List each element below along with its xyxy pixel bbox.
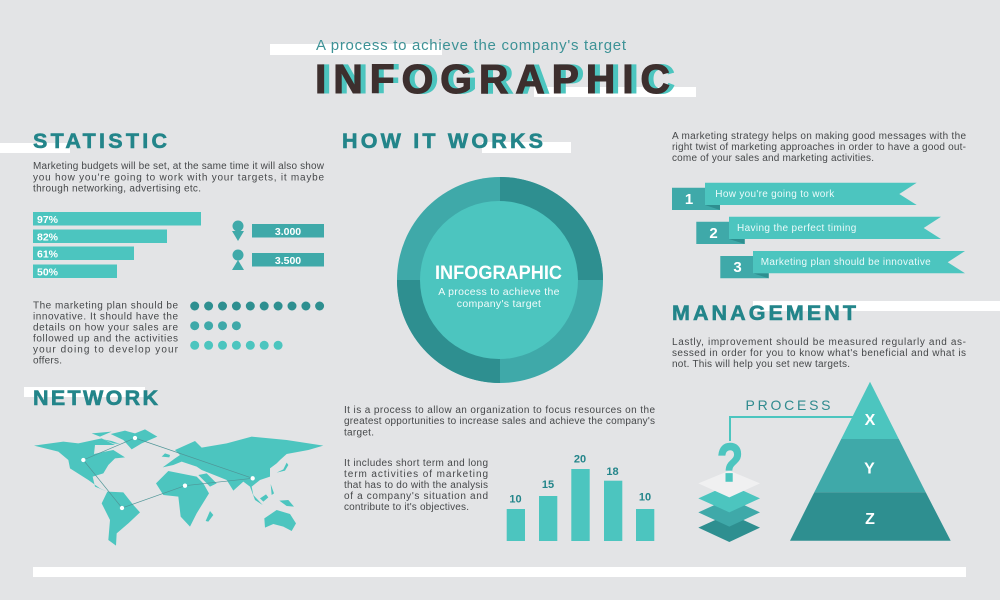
ribbon 3: Marketing plan should be innovative bbox=[761, 257, 931, 268]
ribbon 1 bbox=[672, 183, 917, 210]
text block: marketing plan: The marketing plan should be bbox=[33, 300, 178, 312]
text block: marketing budgets: through networking, advertising etc. bbox=[33, 184, 201, 194]
icon: female figure with 3.500 bbox=[232, 250, 324, 270]
bar chart: values: 10 bbox=[639, 492, 651, 504]
title: INFOGRAPHIC bbox=[320, 56, 675, 102]
text block: management: not. This will help you set new targets. bbox=[672, 359, 850, 370]
ribbon 3: 3 bbox=[733, 259, 742, 276]
title: INFOGRAPHIC bbox=[315, 56, 670, 102]
bar chart: values: 20 bbox=[574, 454, 586, 466]
heading: how it works: HOW IT WORKS bbox=[342, 129, 543, 153]
bar chart: values: 15 bbox=[542, 479, 554, 491]
text block: short and long term bbox=[344, 458, 488, 513]
text block: marketing strategy bbox=[672, 131, 966, 164]
text block: marketing budgets bbox=[33, 161, 325, 194]
dot chart bbox=[190, 302, 324, 350]
icon: male figure with 3.000: 3.000 bbox=[275, 226, 301, 238]
circle diagram bbox=[397, 177, 603, 383]
panel: network bbox=[33, 386, 323, 546]
ribbon 3 bbox=[720, 251, 965, 278]
ribbon 1: 1 bbox=[685, 191, 693, 208]
text block: management: sessed in order for you to know what's beneficial and what is bbox=[672, 348, 966, 359]
pyramid: X bbox=[865, 412, 876, 429]
bar chart: percentages: 97% bbox=[37, 214, 59, 226]
icon: female figure with 3.500: 3.500 bbox=[275, 255, 301, 267]
connector line bbox=[730, 417, 855, 441]
bar chart: percentages bbox=[33, 212, 201, 278]
text block: short and long term: that has to do with the analysis bbox=[344, 480, 488, 491]
world map bbox=[34, 429, 323, 546]
panel: statistic bbox=[33, 129, 325, 366]
text block: process: target. bbox=[344, 428, 374, 438]
ribbon 2: 2 bbox=[709, 225, 718, 242]
text block: marketing plan: followed up and the activities bbox=[33, 334, 178, 344]
heading: statistic: STATISTIC bbox=[33, 129, 167, 153]
ribbon 2 bbox=[696, 217, 941, 244]
bar chart: values bbox=[507, 454, 654, 541]
pyramid bbox=[790, 382, 951, 541]
circle diagram: A process to achieve the bbox=[438, 286, 560, 298]
bar chart: values: 10 bbox=[509, 494, 522, 506]
text block: marketing budgets: Marketing budgets will be set, at the same time it will also show bbox=[33, 161, 325, 172]
text block: process: greatest opportunities to increase sales and achieve the company's bbox=[344, 416, 655, 427]
icon: question mark: ? bbox=[717, 433, 743, 493]
text block: marketing strategy: come of your sales and marketing activities. bbox=[672, 153, 874, 164]
text block: management: Lastly, improvement should be measured regularly and as- bbox=[672, 337, 966, 348]
icon: male figure with 3.000 bbox=[232, 220, 324, 241]
subtitle: A process to achieve the company's target bbox=[316, 37, 627, 54]
bar chart: percentages: 82% bbox=[37, 232, 59, 244]
heading: network: NETWORK bbox=[33, 386, 158, 410]
text block: short and long term: term activities of marketing bbox=[344, 469, 488, 480]
bar chart: values: 18 bbox=[606, 466, 619, 478]
ribbon 1: How you're going to work bbox=[715, 189, 835, 200]
text block: short and long term: of a company's situation and bbox=[344, 491, 488, 502]
text block: marketing plan bbox=[33, 300, 179, 366]
text block: process bbox=[344, 405, 655, 438]
text block: marketing strategy: A marketing strategy helps on making good messages with the bbox=[672, 131, 966, 142]
icon: stacked layers bbox=[698, 471, 760, 542]
bar chart: percentages: 50% bbox=[37, 266, 59, 278]
circle diagram: company's target bbox=[457, 298, 541, 310]
text block: management bbox=[672, 337, 966, 370]
text block: marketing strategy: right twist of marketing approaches in order to have a good out- bbox=[672, 142, 966, 153]
text block: process: It is a process to allow an organization to focus resources on the bbox=[344, 405, 655, 416]
text block: marketing plan: offers. bbox=[33, 356, 62, 366]
process label: PROCESS bbox=[746, 397, 830, 413]
heading: management: MANAGEMENT bbox=[672, 301, 856, 325]
pyramid: Y bbox=[864, 460, 875, 478]
text block: marketing budgets: you how you're going to work with your targets, it maybe bbox=[33, 172, 324, 184]
text block: marketing plan: innovative. It should have the bbox=[33, 312, 178, 322]
process diagram bbox=[698, 382, 951, 542]
circle diagram: INFOGRAPHIC bbox=[435, 263, 562, 284]
text block: marketing plan: details on how your sales are bbox=[33, 322, 178, 334]
text block: short and long term: It includes short term and long bbox=[344, 458, 488, 469]
ribbon 2: Having the perfect timing bbox=[737, 223, 856, 234]
pyramid: Z bbox=[865, 511, 875, 528]
text block: marketing plan: your doing to develop your bbox=[33, 344, 179, 356]
bar chart: percentages: 61% bbox=[37, 248, 59, 260]
text block: short and long term: contribute to it's objectives. bbox=[344, 502, 469, 513]
